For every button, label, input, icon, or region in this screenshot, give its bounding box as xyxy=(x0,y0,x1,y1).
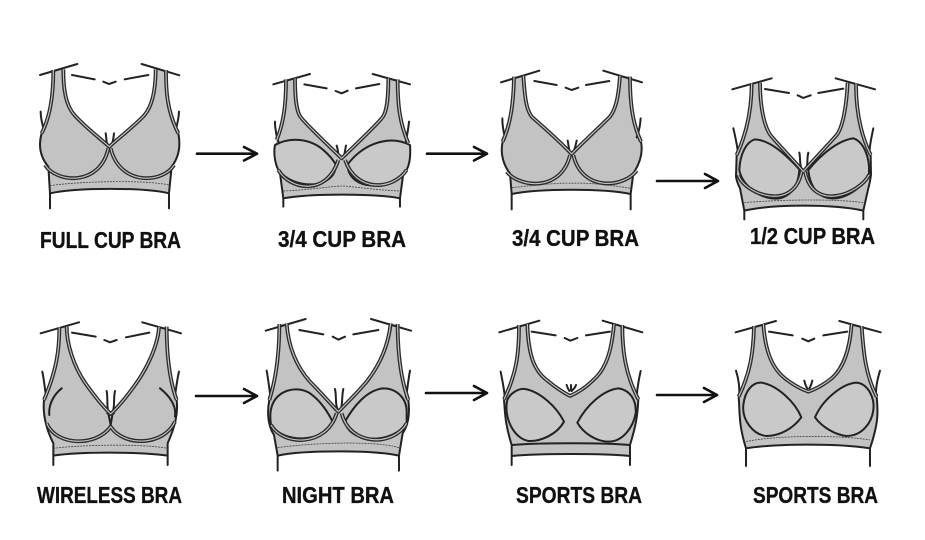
arrow: wireless to night xyxy=(196,389,257,403)
arrow: sports to sports xyxy=(657,388,717,402)
label: full cup bra: FULL CUP BRA xyxy=(40,227,181,253)
icon: 3/4 cup bra illustration xyxy=(273,74,410,207)
arrow: 3/4 cup to 1/2 cup xyxy=(657,174,718,188)
label: 3/4 cup bra: 3/4 CUP BRA xyxy=(278,226,406,252)
icon: night bra illustration xyxy=(266,319,411,471)
panel: 3/4 cup bra second xyxy=(501,71,642,251)
panel: full cup bra xyxy=(40,64,181,253)
icon: sports bra illustration xyxy=(736,321,881,466)
label: sports bra: SPORTS BRA xyxy=(516,482,642,508)
label: 1/2 cup bra: 1/2 CUP BRA xyxy=(750,223,875,249)
panel: night bra xyxy=(266,319,411,508)
panel: 1/2 cup bra xyxy=(732,78,875,249)
arrow: 3/4 cup to 3/4 cup xyxy=(427,147,487,160)
label: sports bra: SPORTS BRA xyxy=(753,482,878,508)
icon: 3/4 cup bra illustration xyxy=(501,71,642,209)
panel: wireless bra xyxy=(37,322,182,508)
arrow: night to sports xyxy=(426,386,487,400)
panel: sports bra first xyxy=(499,321,642,508)
icon: wireless bra illustration xyxy=(41,322,181,465)
arrow: full cup to 3/4 cup xyxy=(197,147,257,160)
label: night bra: NIGHT BRA xyxy=(282,482,394,508)
label: wireless bra: WIRELESS BRA xyxy=(37,482,182,508)
panel: sports bra second xyxy=(736,321,881,508)
icon: sports bra illustration xyxy=(499,321,642,465)
label: 3/4 cup bra: 3/4 CUP BRA xyxy=(512,225,639,251)
icon: full cup bra illustration xyxy=(40,64,179,208)
panel: 3/4 cup bra first xyxy=(273,74,410,252)
icon: 1/2 cup bra illustration xyxy=(732,78,875,219)
